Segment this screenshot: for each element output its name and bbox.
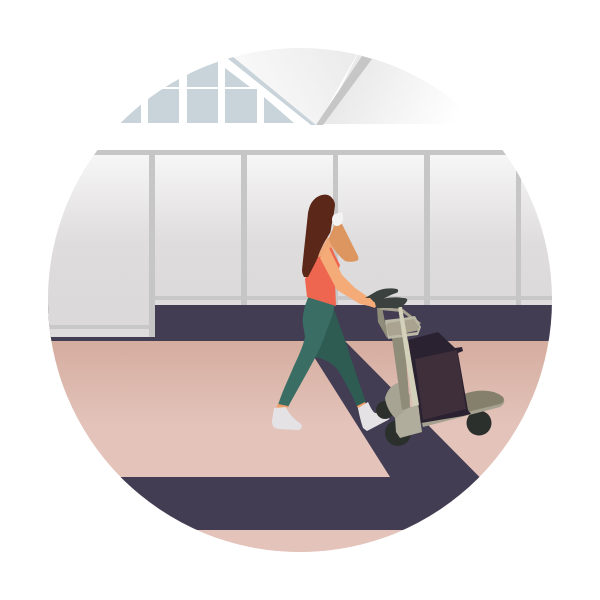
basket frame [385,316,421,339]
circular scene [40,40,560,561]
hair [302,195,335,277]
back post [392,335,410,410]
raised arm [328,224,358,262]
handles [365,288,407,308]
near ankle [276,404,288,411]
skylight window panes [120,62,294,123]
suitcase [408,332,471,423]
airport illustration [48,48,552,552]
left wall block [40,154,155,337]
front wheel [385,420,411,446]
near shoe [272,407,302,430]
basket tray [385,318,420,337]
basket top rim [380,307,421,325]
hand [362,298,376,307]
suitcase body [408,332,471,423]
top [305,247,340,306]
far shoe [358,402,390,431]
back wall with glass panels [40,150,560,306]
right wheel [466,410,492,436]
rear frame curve [385,383,410,418]
carpet and floor [40,305,560,561]
far leg [315,304,366,407]
rear wheel [376,401,394,419]
basket back wall [377,307,388,338]
front plate [395,405,422,438]
luggage trolley [362,288,504,446]
far ankle [357,402,367,411]
base platform lip [421,392,504,427]
shoulder and back skin [316,237,334,262]
suitcase front [415,350,466,420]
roof skylight [120,48,426,125]
face mask [332,212,343,226]
basket [377,307,421,339]
near leg [278,296,335,407]
near arm [320,246,376,308]
woman walking [272,195,390,431]
front pole [398,307,419,407]
base platform [418,391,504,423]
